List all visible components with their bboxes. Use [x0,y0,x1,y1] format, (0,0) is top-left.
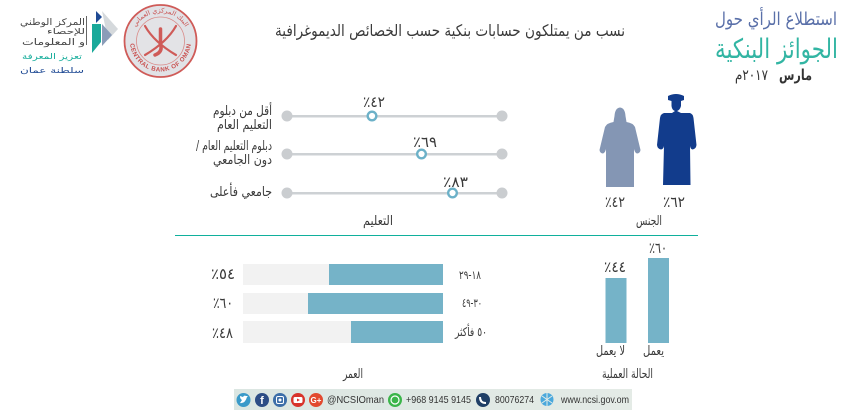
bar: 30-49: ٦٠٪ [213,294,233,312]
icon: google plus: G+ [311,396,322,405]
icon: facebook: f [260,395,264,407]
title: survey line: استطلاع الرأي حول [715,7,837,30]
logo: Central Bank of Oman: CENTRAL BANK OF OMAN [130,44,191,72]
logo tagline: Oman: سلطنة عمان [20,66,84,75]
logo mark: triangle [92,11,118,53]
title: date: مارس [779,66,812,84]
label: employment status: الحالة العملية [602,367,653,382]
slider: university and above [210,173,508,200]
bar: not working [596,258,626,359]
icon: whatsapp [388,393,402,407]
handle: @NCSIOman [327,394,384,406]
title: date: ٢٠١٧م [735,66,768,84]
icon: instagram [273,393,287,407]
logo: NCSI [20,11,118,75]
panel: gender [600,94,696,229]
logo: Central Bank of Oman: البنك المركزي العماني [134,8,190,27]
footer contact bar [234,389,632,410]
icon: twitter [236,393,250,407]
slider: below general diploma: التعليم العام [217,118,272,133]
slider: general diploma to below university: دون الجامعي [213,153,272,168]
slider: below general diploma [213,93,508,133]
title: date [735,66,812,84]
bar: not working: لا يعمل [596,344,625,359]
logo tagline: teal: تعزيز المعرفة [22,52,82,61]
panel: age bar chart [211,264,487,382]
slider: university and above: ٨٣٪ [443,173,468,191]
icon: google plus [309,393,323,407]
value: men: ٦٢٪ [663,193,685,211]
bar: 30-49 [213,293,482,314]
whatsapp number: +968 9145 9145 [406,394,471,406]
slider: general diploma to below university: ٦٩٪ [413,133,437,151]
panel: employment bar chart [596,239,669,382]
value: women: ٤٢٪ [605,193,625,211]
bar: 50 and above: ٥٠ فأكثر [454,323,487,340]
icon: globe [540,393,554,406]
bar: 50 and above [212,321,487,343]
icon: facebook [255,393,269,407]
bar: not working: ٤٤٪ [604,258,626,276]
logo: Central Bank of Oman [124,4,198,78]
phone number: 80076274 [495,394,534,406]
slider: general diploma to below university [196,133,508,168]
bar: working: يعمل [643,344,664,359]
slider: below general diploma: ٤٢٪ [363,93,385,111]
bar: 30-49: ٣٠-٤٩ [462,296,482,310]
bar: 18-29: ١٨-٢٩ [459,268,481,282]
label: gender: الجنس [636,214,662,229]
bar: working [643,239,669,359]
bar: 50 and above: ٤٨٪ [212,324,233,342]
bar: working: ٦٠٪ [649,239,667,257]
bar: 18-29: ٥٤٪ [211,265,235,283]
slider: general diploma to below university: دبلوم التعليم العام / [196,139,272,154]
logo text: NCSI name: المركز الوطني [20,18,85,28]
title block [715,7,838,84]
logo text: NCSI name [20,18,85,48]
panel: education [196,93,508,229]
logo text: NCSI name: للإحصاء [47,27,85,37]
logo text: NCSI name: و المعلومات [22,38,85,48]
icon: man [657,94,696,185]
icon: youtube [291,393,305,407]
heading: نسب من يمتلكون حسابات بنكية حسب الخصائص الديموغرافية [275,21,625,41]
slider: below general diploma: أقل من دبلوم [213,102,272,119]
slider: university and above: جامعي فأعلى [210,182,272,200]
label: education: التعليم [363,214,393,229]
icon: khanjar and swords [145,26,176,55]
icon: woman [600,108,640,187]
icon: phone [476,393,490,407]
bar: 18-29 [211,264,481,285]
website: www.ncsi.gov.om [560,394,629,406]
label: age: العمر [342,367,363,382]
